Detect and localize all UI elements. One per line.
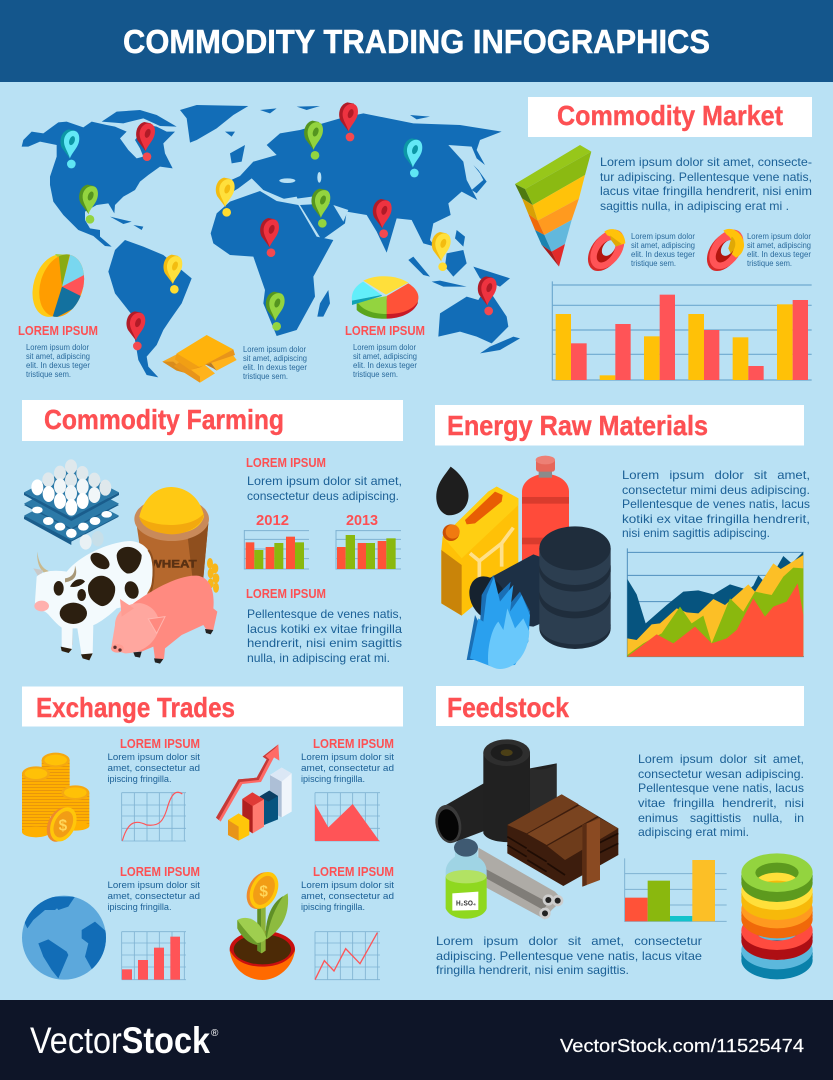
text: feedstock lower [436,934,702,977]
heading: energy raw materials: Energy Raw Materials [447,410,708,441]
text: feedstock description: Pellentesque vene natis, lacus [638,781,804,795]
text: market description: Lorem ipsum dolor sit amet, consecte- [600,155,812,169]
text: energy description [622,468,810,540]
text: donut caption right: tristique sem. [747,259,792,268]
text: exchange block 2: LOREM IPSUM [313,737,394,751]
text: middle map caption: Lorem ipsum dolor [243,345,306,354]
panel: world map [18,102,520,383]
line chart: curve [122,792,186,841]
text: exchange block 4: LOREM IPSUM [313,865,394,879]
footer url: VectorStock.com/11525474 [560,1035,804,1056]
text: farming lorem 1: consectetur deus adipiscing. [247,489,399,503]
text: left map caption: LOREM IPSUM [18,324,98,338]
text: energy description: kotiki ex vitae fringilla hendrerit, [622,512,810,526]
text: exchange block 3: ipiscing fringilla. [108,902,172,913]
icon: coins: $ [59,818,68,835]
icon: pig [111,576,217,664]
mini bar chart 2012 [244,512,309,569]
icon: egg trays [24,459,119,550]
text: feedstock description [638,752,804,839]
mini bar chart 2012: 2012 [256,512,289,529]
icon: black pipe [432,783,487,846]
icon: wood stack [507,794,618,887]
text: left map caption: sit amet, adipiscing [26,352,90,361]
text: exchange block 4: Lorem ipsum dolor sit [301,880,394,891]
text: farming lorem 2: LOREM IPSUM [246,587,326,601]
text: donut caption right: elit. In dexus teger [747,250,811,259]
mini bar chart 2013 [336,512,401,569]
text: exchange block 4 [301,865,394,913]
icon: feedstock materials group [432,739,618,919]
text: middle map caption: elit. In dexus teger [243,363,307,372]
text: farming lorem 2: lacus kotiki ex vitae fringilla [247,622,402,636]
text: exchange block 3 [108,865,200,913]
icon: oil drop [436,467,469,515]
text: exchange block 2: ipiscing fringilla. [301,774,365,785]
gold bars [162,335,237,383]
text: feedstock lower: adipiscing. Pellentesque vene natis, lacus vitae [436,949,702,963]
registered mark: ® [211,1028,219,1039]
text: exchange block 2 [301,737,394,785]
text: energy description: nisi enim sagittis adipiscing. [622,526,770,540]
text: feedstock lower: fringilla hendrerit, nisi enim sagittis. [436,963,629,977]
footer logo: VectorStock [30,1020,210,1061]
text: exchange block 2: Lorem ipsum dolor sit [301,752,394,763]
text: right map caption: Lorem ipsum dolor [353,343,416,352]
text: donut caption right: sit amet, adipiscing [747,241,811,250]
text: feedstock lower: Lorem ipsum dolor sit amet, consectetur [436,934,702,948]
header banner [0,0,833,82]
text: farming lorem 1 [246,456,402,503]
text: feedstock description: vitae fringilla hendrerit, nisi [638,796,804,810]
text: exchange block 1: ipiscing fringilla. [108,774,172,785]
text: middle map caption: tristique sem. [243,372,288,381]
text: exchange block 1: LOREM IPSUM [120,737,200,751]
text: exchange block 3: Lorem ipsum dolor sit [108,880,200,891]
text: exchange block 3: LOREM IPSUM [120,865,200,879]
icon: energy materials group [436,456,611,669]
panel: feedstock [432,686,813,979]
icon: globe [22,893,108,980]
text: market description: tur adipiscing. Pellentesque vene natis, [600,170,812,184]
text: right map caption: LOREM IPSUM [345,324,425,338]
text: middle map caption: sit amet, adipiscing [243,354,307,363]
text: energy description: Lorem ipsum dolor sit amet, [622,468,810,482]
text: market description [600,155,812,213]
text: donut caption left: sit amet, adipiscing [631,241,695,250]
text: donut caption right: Lorem ipsum dolor [747,232,811,241]
text: left map caption: elit. In dexus teger [26,361,90,370]
panel: commodity market [515,97,812,380]
heading: commodity market: Commodity Market [557,100,783,131]
text: feedstock description: enimus sagittistis nulla, in [638,811,804,825]
text: farming lorem 1: Lorem ipsum dolor sit amet, [247,474,402,488]
text: farming lorem 2: Pellentesque de venes natis, [247,607,402,621]
title: COMMODITY TRADING INFOGRAPHICS [123,23,710,60]
heading: exchange trades: Exchange Trades [36,692,235,723]
heading: commodity farming [22,400,403,441]
text: farming lorem 1: LOREM IPSUM [246,456,326,470]
heading: exchange trades [22,686,403,726]
text: farming lorem 2: nulla, in adipiscing erat mi. [247,651,390,665]
text: market description: lacus vitae fringilla hendrerit, nisi enim [600,184,812,198]
icon: standing barrel [539,526,611,649]
icon: acid bottle [446,839,487,919]
icon: lying barrel [462,554,553,627]
icon: rising bars with arrow [216,744,292,841]
text: exchange block 1 [108,737,200,785]
icon: stacked rings [741,853,813,979]
heading: energy raw materials [435,405,804,446]
icon: wheat sack: WHEAT [149,558,197,570]
text: feedstock description: Lorem ipsum dolor sit amet, [638,752,804,766]
text: left map caption [18,324,98,379]
text: left map caption: tristique sem. [26,370,71,379]
text: feedstock description: adipiscing erat mimi. [638,825,749,839]
icon: blue flame [467,575,530,669]
text: right map caption: tristique sem. [353,370,398,379]
heading: feedstock [436,686,804,726]
footer bar [0,1000,833,1080]
area chart: exchange [315,793,380,841]
text: right map caption: sit amet, adipiscing [353,352,417,361]
text: donut caption left: elit. In dexus teger [631,250,695,259]
icon: cow [33,541,154,660]
icon: rubber roll [483,739,557,842]
icon: jerry can [441,487,518,616]
icon: coins [22,753,89,846]
tilted pie chart [32,254,84,317]
bar chart: feedstock [625,858,727,921]
text: exchange block 4: amet, consectetur ad [301,891,394,902]
text: energy description: consectetur mimi deus adipiscing. [622,483,810,497]
text: energy description: Pellentesque de venes natis, lacus [622,497,810,511]
text: exchange block 4: ipiscing fringilla. [301,902,365,913]
area chart [627,548,804,657]
heading: commodity market [528,97,812,137]
text: donut caption left: tristique sem. [631,259,676,268]
text: market description: sagittis nulla, in adipiscing erat mi . [600,199,789,213]
inland seas [277,172,348,222]
line chart: zigzag [315,932,380,980]
funnel chart [515,145,591,267]
text: exchange block 2: amet, consectetur ad [301,763,394,774]
text: middle map caption [243,345,307,381]
icon: money plant [230,867,295,980]
panel: energy raw materials [435,405,810,669]
icon: acid bottle: H₂SO₄ [456,900,476,907]
donut chart right [700,223,750,277]
location pins [60,102,497,350]
text: farming lorem 2: hendrerit, nisi enim sagittis [247,636,402,650]
text: exchange block 1: amet, consectetur ad [108,763,200,774]
icon: money plant: $ [259,884,268,901]
text: left map caption: Lorem ipsum dolor [26,343,89,352]
pie chart 3d [352,276,418,319]
donut chart left [581,223,631,277]
world map continents [22,105,520,377]
icon: gas cylinder [522,456,569,562]
bar chart: market [552,281,812,380]
heading: feedstock: Feedstock [447,692,569,723]
text: exchange block 1: Lorem ipsum dolor sit [108,752,200,763]
bar chart: exchange [122,932,186,980]
icon: metal tubes [478,848,563,919]
text: donut caption left: Lorem ipsum dolor [631,232,695,241]
text: right map caption [345,324,425,379]
text: donut caption left [631,232,695,268]
icon: wheat sack [134,487,219,596]
panel: exchange trades [22,686,403,980]
text: donut caption right [747,232,811,268]
text: feedstock description: consectetur wesan adipiscing. [638,767,804,781]
panel: commodity farming [22,400,403,665]
text: exchange block 3: amet, consectetur ad [108,891,200,902]
text: farming lorem 2 [246,587,402,665]
text: right map caption: elit. In dexus teger [353,361,417,370]
heading: commodity farming: Commodity Farming [44,404,284,435]
mini bar chart 2013: 2013 [346,512,378,529]
